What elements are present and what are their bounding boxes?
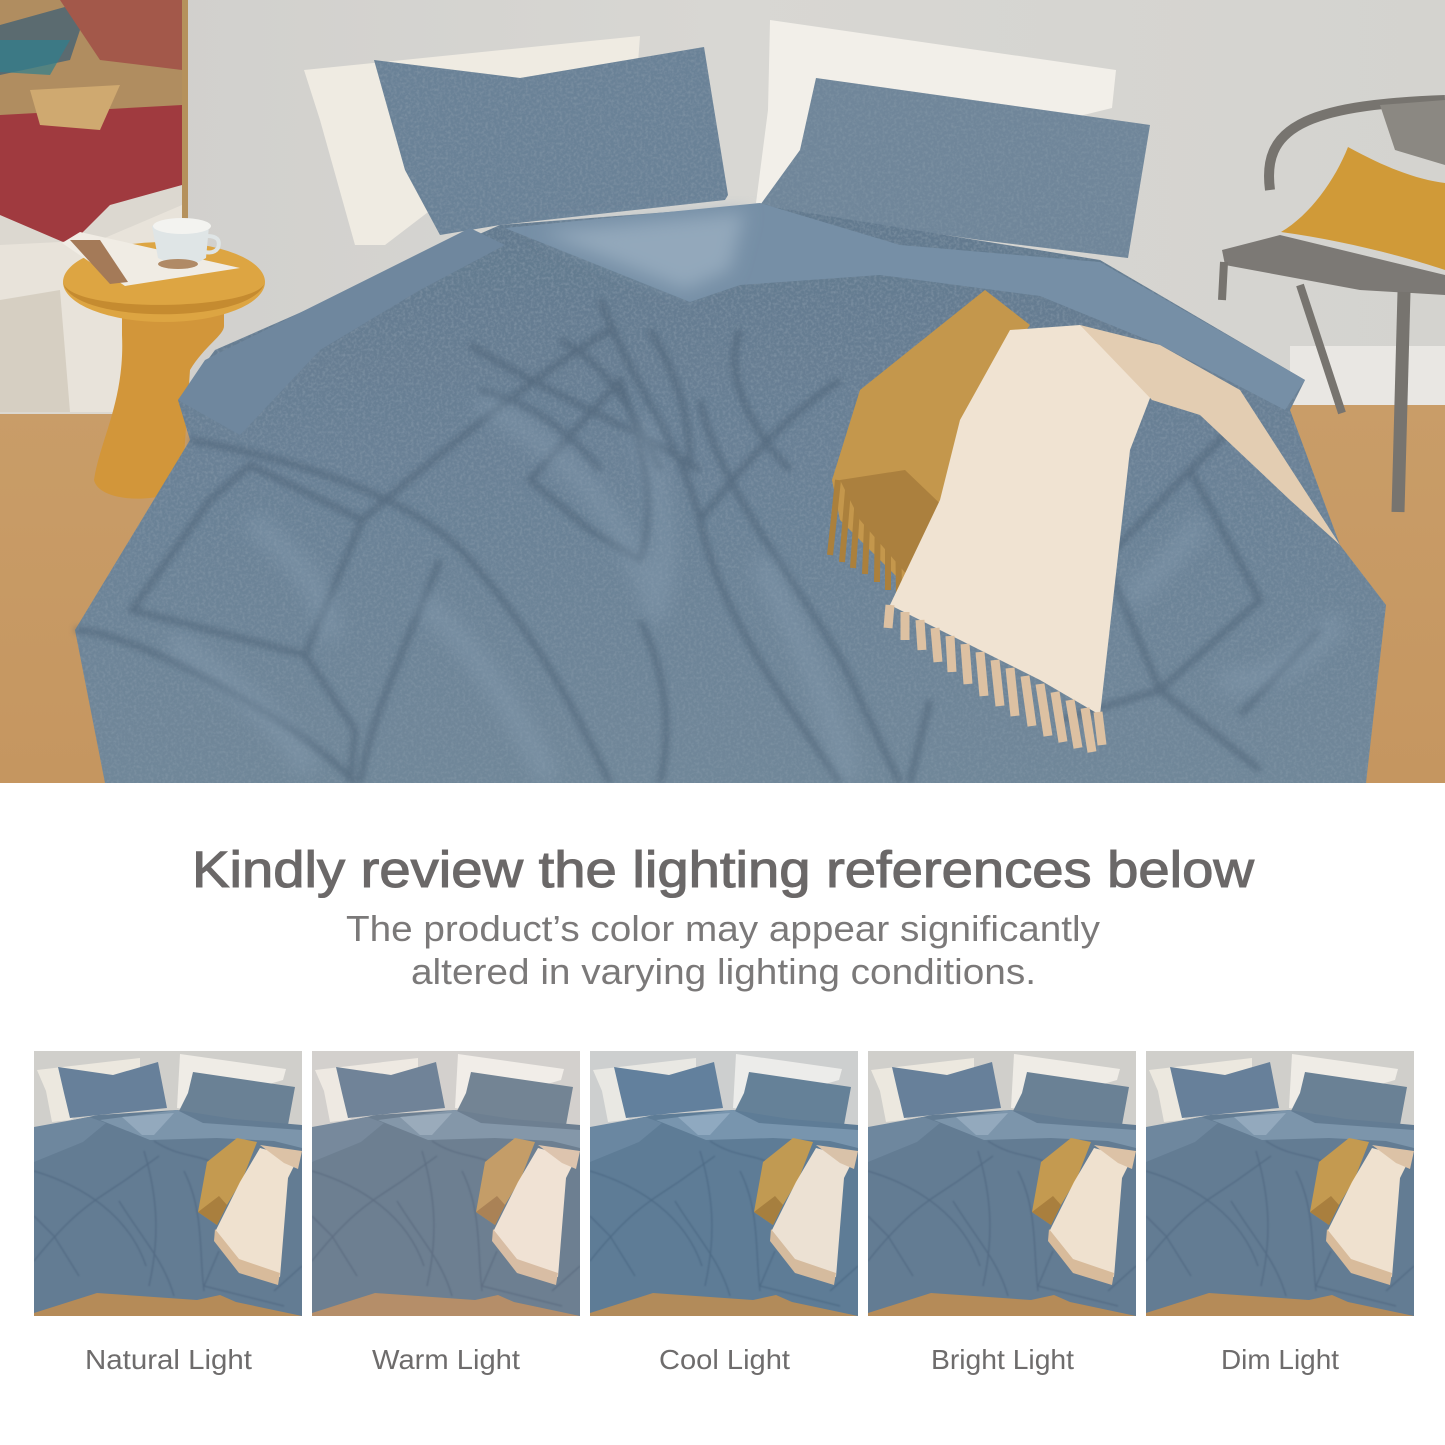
caption: cool light: Cool Light bbox=[659, 1344, 790, 1375]
quilting stitch lines bbox=[75, 300, 1320, 783]
comforter body bbox=[75, 205, 1386, 783]
subheading: The product’s color may appear significantly bbox=[346, 908, 1100, 949]
round mustard side table bbox=[63, 242, 265, 499]
throw mustard fringe bbox=[827, 480, 902, 592]
throw tan tail bbox=[1080, 325, 1340, 545]
blue pillow right bbox=[758, 78, 1150, 258]
chair bbox=[1222, 100, 1445, 512]
comforter folds highlight bbox=[170, 400, 1340, 780]
throw mustard shading bbox=[840, 470, 939, 573]
thumbnail: dim light bbox=[1146, 1051, 1414, 1316]
captions bbox=[85, 1344, 1339, 1375]
subheading bbox=[346, 908, 1100, 992]
thumbnail: bright light bbox=[868, 1051, 1136, 1316]
abstract painting bbox=[0, 0, 188, 414]
thumbnail: natural light bbox=[34, 1051, 302, 1316]
throw blanket bbox=[830, 290, 1340, 752]
mustard cushion bbox=[1281, 147, 1445, 270]
caption: dim light: Dim Light bbox=[1221, 1344, 1339, 1375]
caption: natural light: Natural Light bbox=[85, 1344, 252, 1375]
heading: Kindly review the lighting references below bbox=[192, 841, 1254, 898]
caption: warm light: Warm Light bbox=[372, 1344, 520, 1375]
wall bbox=[188, 0, 1445, 384]
baseboard bbox=[1290, 346, 1445, 406]
thumbnail: warm light bbox=[312, 1051, 580, 1316]
throw mustard panel bbox=[832, 290, 1030, 600]
satin highlight bbox=[540, 212, 745, 290]
subheading: altered in varying lighting conditions. bbox=[411, 951, 1036, 992]
hero photo: bedroom scene bbox=[0, 0, 1445, 783]
thumbnail: cool light bbox=[590, 1051, 858, 1316]
caption: bright light: Bright Light bbox=[931, 1344, 1074, 1375]
white back pillow right bbox=[756, 20, 1116, 203]
throw cream panel bbox=[890, 325, 1155, 715]
satin reverse fold top bbox=[505, 203, 1305, 410]
satin reverse fold left bbox=[178, 228, 505, 435]
white back pillow left bbox=[304, 36, 640, 245]
blue pillow left bbox=[374, 47, 728, 235]
wood floor bbox=[0, 405, 1445, 783]
magazine and cup bbox=[62, 218, 240, 286]
throw cream fringe bbox=[888, 605, 1102, 752]
